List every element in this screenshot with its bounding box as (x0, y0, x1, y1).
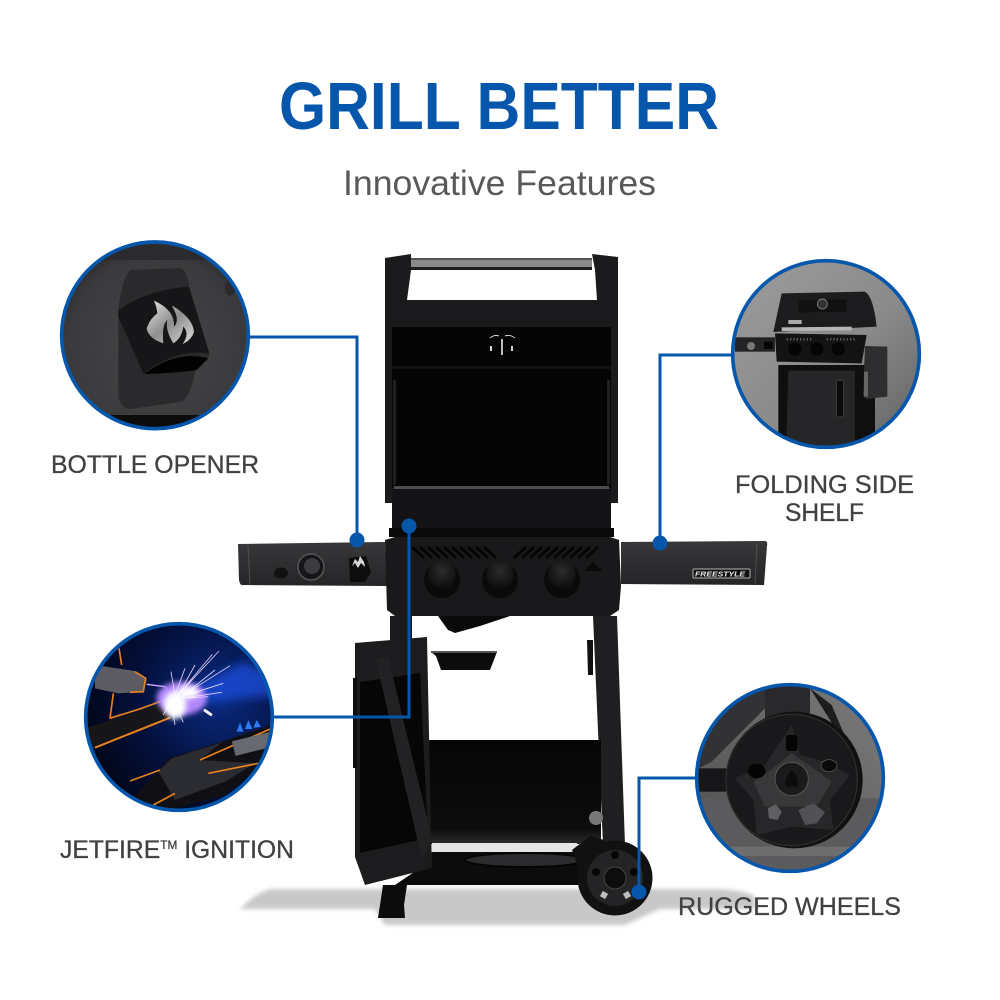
right cart leg (593, 616, 625, 845)
burner underside (438, 616, 510, 633)
knob left (424, 561, 460, 598)
grill lid with open interior (385, 254, 618, 537)
callout: folding side shelf (652, 258, 923, 550)
left side shelf with burner controls (238, 542, 387, 586)
label: folding side shelf (735, 471, 914, 527)
cart base (395, 843, 585, 885)
label: folding side shelf: SHELF (785, 499, 864, 527)
firebox control panel (385, 537, 621, 616)
connector line (272, 526, 409, 717)
callout: jetfire ignition (82, 518, 417, 817)
title: GRILL BETTER (279, 69, 719, 144)
marker dot (350, 532, 364, 548)
circular photo: bottle opener (57, 237, 257, 437)
hose hardware (587, 640, 593, 675)
label: jetfire ignition: TM (160, 838, 177, 852)
lid thermometer (490, 335, 515, 355)
drip tray (431, 651, 497, 670)
callout: bottle opener (57, 237, 365, 548)
circular photo: ignition spark (82, 620, 278, 817)
knob right (544, 561, 580, 598)
knob centre (482, 561, 518, 598)
label: jetfire ignition: JETFIRE (60, 836, 161, 864)
right side shelf (621, 541, 767, 585)
marker dot (632, 884, 646, 900)
marker dot (402, 518, 416, 534)
label: jetfire ignition: IGNITION (177, 836, 294, 864)
door foot (378, 885, 407, 918)
circular photo: wheel (692, 680, 892, 880)
grill wheel (572, 811, 652, 916)
label: bottle opener: BOTTLE OPENER (51, 451, 259, 479)
marker dot (652, 536, 668, 550)
circular photo: folded shelf grill (730, 258, 923, 452)
grill illustration (238, 254, 767, 918)
open cabinet door (353, 616, 432, 885)
ground shadow (240, 889, 755, 925)
callout: rugged wheels (632, 680, 892, 900)
vent louvers (412, 547, 598, 558)
cart back panel (425, 740, 601, 844)
connector line (660, 355, 733, 543)
connector line (249, 337, 357, 540)
connector line (639, 778, 696, 892)
freestyle badge: FREESTYLE (695, 570, 746, 578)
label: rugged wheels: RUGGED WHEELS (678, 893, 901, 921)
subtitle: Innovative Features (343, 164, 656, 203)
label: folding side shelf: FOLDING SIDE (735, 471, 914, 499)
brand mark (584, 562, 603, 571)
